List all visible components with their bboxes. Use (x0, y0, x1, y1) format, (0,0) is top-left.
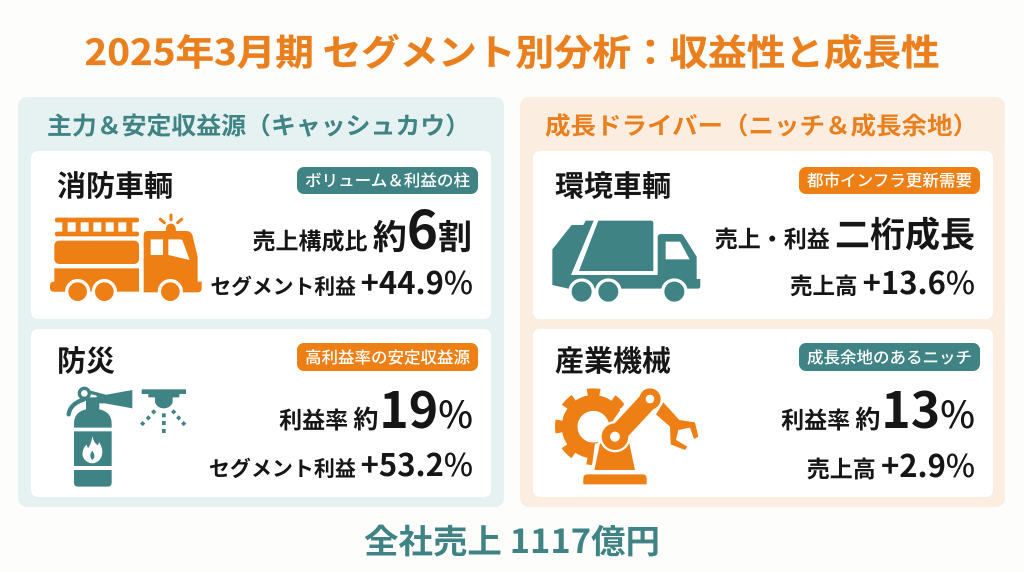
card: fire trucks (31, 151, 491, 319)
metric: double digit growth: 売上・利益 二桁成長 (715, 207, 975, 258)
icon: gear and robot arm (559, 388, 698, 484)
card: industrial machinery (533, 329, 993, 497)
card: environmental vehicles (533, 151, 993, 319)
badge: volume and profit: ボリューム＆利益の柱 (305, 167, 470, 191)
footer: company sales: 全社売上 1117億円 (364, 515, 660, 563)
metric: segment profit: セグメント利益 +44.9% (210, 258, 473, 303)
card title: industrial machinery: 産業機械 (555, 338, 671, 380)
metric: profit margin: 利益率 約 13% (781, 371, 975, 443)
icon: garbage truck (552, 221, 700, 303)
metric: segment profit: セグメント利益 +53.2% (209, 440, 473, 485)
badge: niche: 成長余地のあるニッチ (807, 344, 972, 368)
panel heading: main: 主力＆安定収益源（キャッシュカウ） (47, 106, 470, 141)
panel: growth drivers (520, 97, 1005, 507)
icon: extinguisher and sprinkler (69, 388, 186, 487)
panel heading: growth: 成長ドライバー（ニッチ＆成長余地） (545, 106, 978, 141)
panel: main and stable revenue (18, 97, 504, 507)
metric: profit margin: 利益率 約 19% (279, 371, 473, 443)
icon: fire truck (50, 215, 202, 303)
card: disaster prevention (31, 329, 491, 497)
badge: urban infrastructure: 都市インフラ更新需要 (807, 167, 972, 191)
metric: sales growth: 売上高 +2.9% (807, 441, 975, 486)
metric: sales growth: 売上高 +13.6% (790, 258, 975, 303)
metric: sales share: 売上構成比 約6割 (252, 189, 472, 265)
card title: fire trucks: 消防車輌 (57, 163, 173, 205)
card title: environmental vehicles: 環境車輌 (555, 163, 671, 205)
badge: high margin: 高利益率の安定収益源 (305, 344, 470, 368)
card title: disaster prevention: 防災 (57, 338, 115, 380)
title: 2025年3月期 セグメント別分析：収益性と成長性 (84, 24, 940, 76)
